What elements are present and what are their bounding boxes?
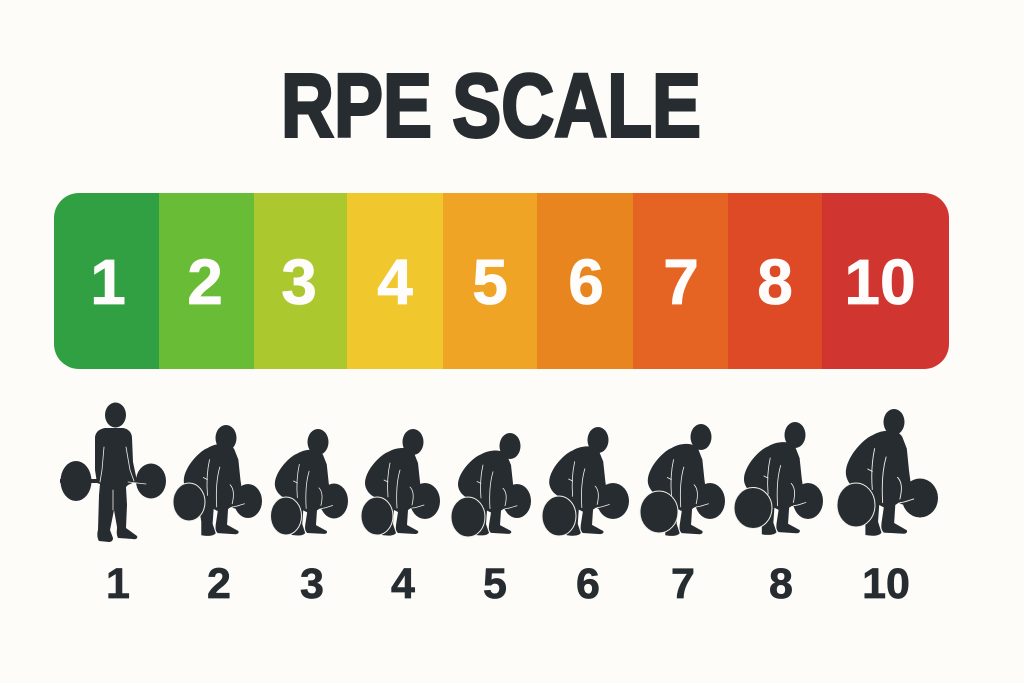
- title: RPE SCALE: [281, 56, 701, 156]
- lifter 1: standing: [60, 402, 166, 542]
- lifter labels: 10: [862, 560, 910, 608]
- lifter labels: 7: [671, 560, 695, 608]
- scale numbers: 8: [757, 246, 793, 318]
- scale numbers: 7: [663, 246, 699, 318]
- lifter 4: [361, 429, 440, 536]
- scale numbers: 2: [187, 246, 223, 318]
- scale numbers: 4: [377, 246, 413, 318]
- lifter 10: [837, 409, 938, 536]
- scale numbers: [90, 246, 916, 318]
- scale numbers: 1: [90, 246, 126, 318]
- lifter 5: [451, 433, 531, 537]
- lifter 7: [640, 424, 725, 536]
- scale numbers: 10: [844, 246, 916, 318]
- lifter labels: 5: [483, 560, 507, 608]
- lifter 6: [542, 427, 629, 536]
- lifter 2: [173, 425, 262, 536]
- lifter labels: 1: [106, 560, 130, 608]
- lifter 3: [270, 429, 348, 535]
- lifter 8: [734, 422, 823, 535]
- lifter labels: 6: [576, 560, 600, 608]
- colour scale bar: [54, 193, 949, 369]
- lifter labels: 4: [391, 560, 415, 608]
- lifter labels: [106, 560, 910, 608]
- lifter labels: 8: [769, 560, 793, 608]
- scale numbers: 3: [281, 246, 317, 318]
- scale numbers: 5: [472, 246, 508, 318]
- lifter labels: 3: [300, 560, 324, 608]
- lifter labels: 2: [207, 560, 231, 608]
- scale numbers: 6: [568, 246, 604, 318]
